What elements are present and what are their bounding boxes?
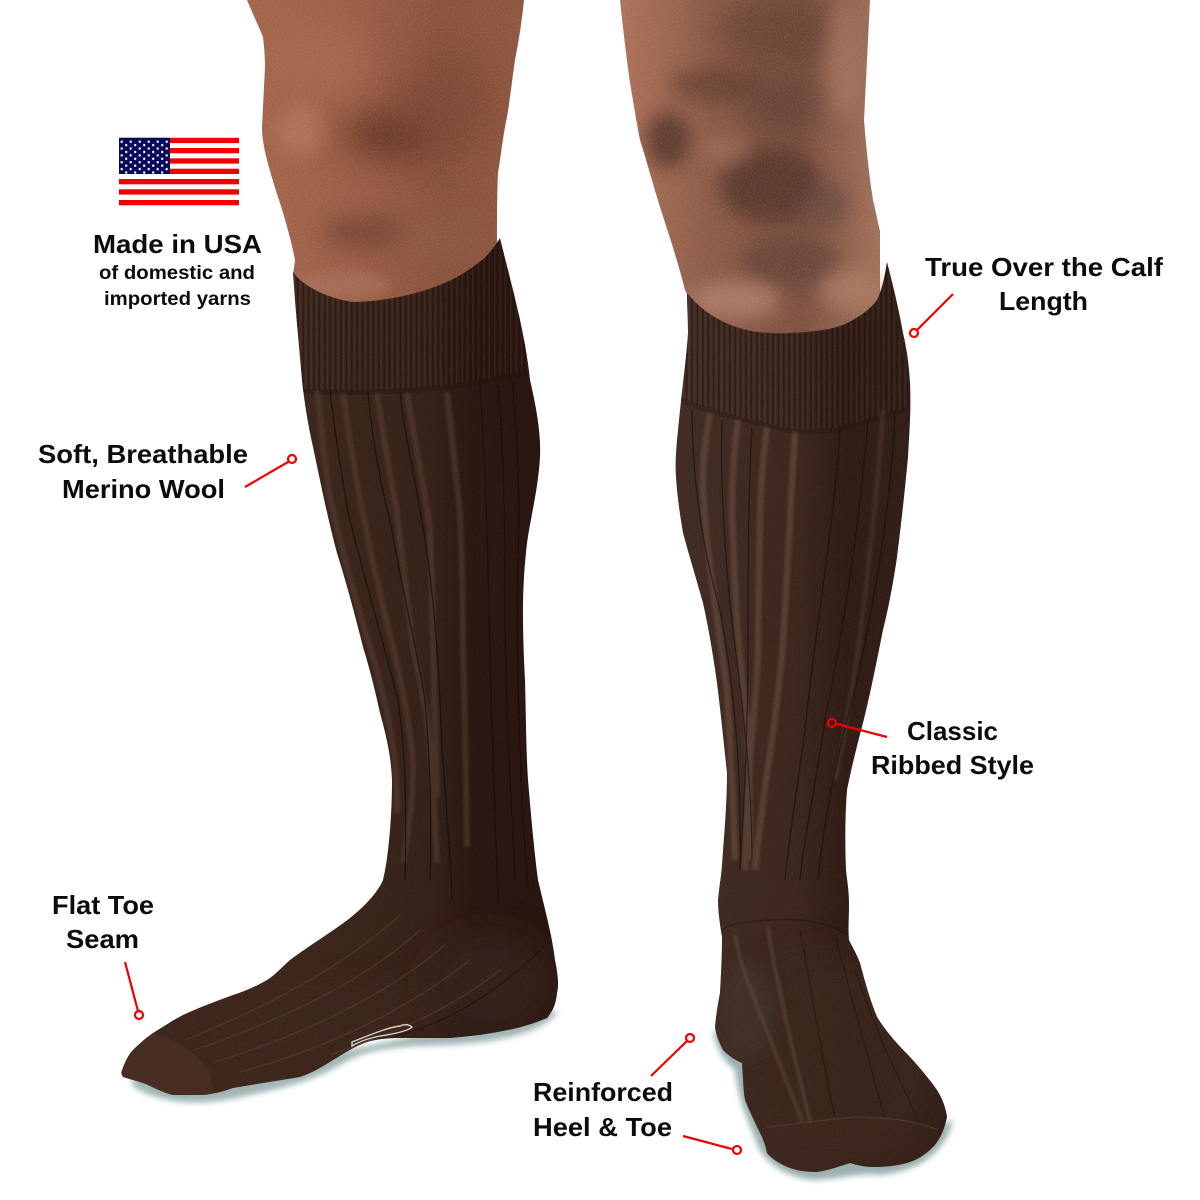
photo: right leg skin [615, 0, 880, 350]
callout line: ribbed style [828, 719, 887, 737]
text: Made in USA [93, 229, 262, 310]
callout line: merino wool [245, 455, 296, 487]
photo: left leg skin [240, 0, 530, 312]
text: Classic Ribbed Style [871, 716, 1034, 780]
cuff ribbing [680, 262, 912, 430]
callout line: flat toe seam [125, 962, 143, 1019]
text: Flat Toe Seam: Flat Toe [52, 890, 154, 920]
text: Soft, Breathable Merino Wool [38, 439, 248, 504]
text: Classic Ribbed Style: Ribbed Style [871, 750, 1034, 780]
text: Soft, Breathable Merino Wool: Soft, Breathable [38, 439, 248, 469]
text: Flat Toe Seam: Seam [66, 924, 139, 954]
text: Classic Ribbed Style: Classic [907, 716, 998, 746]
left sock [115, 230, 565, 1105]
foot ribs [735, 927, 810, 1122]
callout line: toe [683, 1136, 741, 1154]
floor shadow: left foot [130, 1010, 558, 1102]
text: True Over the Calf Length [925, 252, 1163, 316]
text: Flat Toe Seam [52, 890, 154, 954]
toe cap [122, 1033, 213, 1096]
text: Reinforced Heel & Toe: Heel & Toe [533, 1112, 672, 1142]
toe seam [765, 1124, 940, 1172]
cuff ribbing [293, 238, 535, 391]
text: Soft, Breathable Merino Wool: Merino Wool [62, 474, 225, 504]
text: True Over the Calf Length: Length [999, 286, 1088, 316]
foot tone [720, 950, 940, 1170]
leg ribs [317, 390, 467, 863]
text: Made in USA: of domestic and [99, 262, 255, 284]
sole label [352, 1025, 412, 1046]
text: True Over the Calf Length: True Over the Calf [925, 252, 1163, 282]
leg ribs [703, 413, 795, 870]
callout line: calf length [910, 294, 953, 337]
text: Made in USA: imported yarns [104, 288, 251, 310]
text: Reinforced Heel & Toe: Reinforced [533, 1077, 673, 1107]
text: Made in USA: Made in USA [93, 229, 262, 259]
ankle crease [722, 920, 847, 935]
text: Reinforced Heel & Toe [533, 1077, 673, 1142]
heel tone [452, 937, 558, 1038]
right sock [670, 255, 955, 1180]
floor shadow: right foot [713, 1030, 953, 1180]
foot ribs [185, 915, 500, 1072]
callout line: heel [651, 1034, 694, 1076]
icon: American flag [119, 138, 239, 205]
